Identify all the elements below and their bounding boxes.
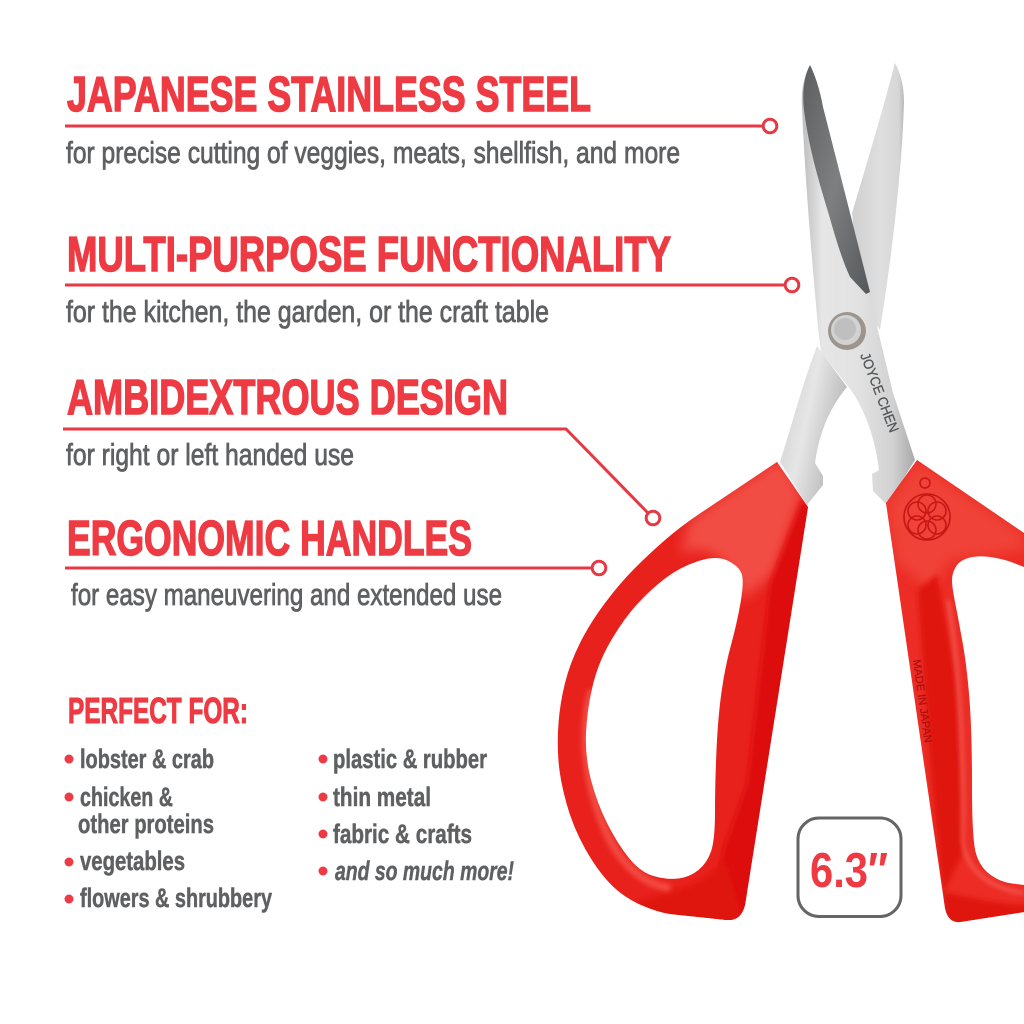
callout line bbox=[65, 119, 777, 133]
items: lobster & crab bbox=[80, 744, 214, 774]
made in japan mark: MADE IN JAPAN bbox=[910, 659, 934, 744]
feature: ambidextrous design bbox=[63, 371, 660, 525]
left handle bbox=[558, 458, 812, 925]
handle opening bbox=[586, 558, 743, 879]
items: flowers & shrubbery bbox=[80, 883, 272, 913]
heading: AMBIDEXTROUS DESIGN bbox=[67, 371, 508, 425]
blade bevel bbox=[803, 65, 870, 294]
engraved brand: JOYCE CHEN bbox=[857, 350, 902, 434]
rear blade bbox=[852, 63, 904, 330]
right handle opening bbox=[952, 556, 1024, 885]
scissors photo bbox=[558, 63, 1024, 930]
items bbox=[78, 744, 272, 913]
bullets bbox=[64, 754, 74, 904]
left tang bbox=[780, 346, 847, 505]
front blade and right tang bbox=[802, 65, 915, 505]
feature: ergonomic handles bbox=[65, 512, 606, 612]
feature: japanese stainless steel bbox=[65, 68, 777, 170]
feature: multi-purpose functionality bbox=[65, 228, 799, 329]
uses list: column two bbox=[318, 744, 514, 886]
items: vegetables bbox=[80, 846, 185, 876]
right handle bbox=[886, 460, 1024, 930]
description: for precise cutting of veggies, meats, shellfish, and more bbox=[66, 135, 680, 170]
description: for easy maneuvering and extended use bbox=[71, 577, 502, 612]
pivot screw bbox=[828, 312, 866, 350]
heading: JAPANESE STAINLESS STEEL bbox=[67, 68, 591, 122]
size badge: 6.3″ bbox=[810, 844, 888, 898]
items: thin metal bbox=[333, 782, 431, 812]
callout line bbox=[65, 561, 606, 575]
uses list: column one bbox=[64, 744, 272, 913]
items: fabric & crafts bbox=[333, 819, 472, 849]
callout line bbox=[63, 429, 660, 525]
items bbox=[333, 744, 514, 886]
handle shading bbox=[586, 458, 812, 925]
description: for right or left handed use bbox=[66, 437, 354, 472]
perfect for heading: PERFECT FOR: bbox=[68, 690, 248, 731]
items: plastic & rubber bbox=[333, 744, 487, 774]
description: for the kitchen, the garden, or the craft table bbox=[66, 294, 549, 329]
items: and so much more! bbox=[335, 856, 514, 886]
callout line bbox=[65, 278, 799, 292]
size badge bbox=[798, 818, 901, 916]
items: chicken & bbox=[80, 782, 173, 812]
heading: MULTI-PURPOSE FUNCTIONALITY bbox=[67, 228, 671, 282]
items: other proteins bbox=[78, 809, 214, 839]
handle emblem bbox=[904, 478, 950, 540]
bullets bbox=[318, 754, 328, 876]
heading: ERGONOMIC HANDLES bbox=[67, 512, 472, 566]
right handle shading bbox=[887, 462, 1024, 930]
